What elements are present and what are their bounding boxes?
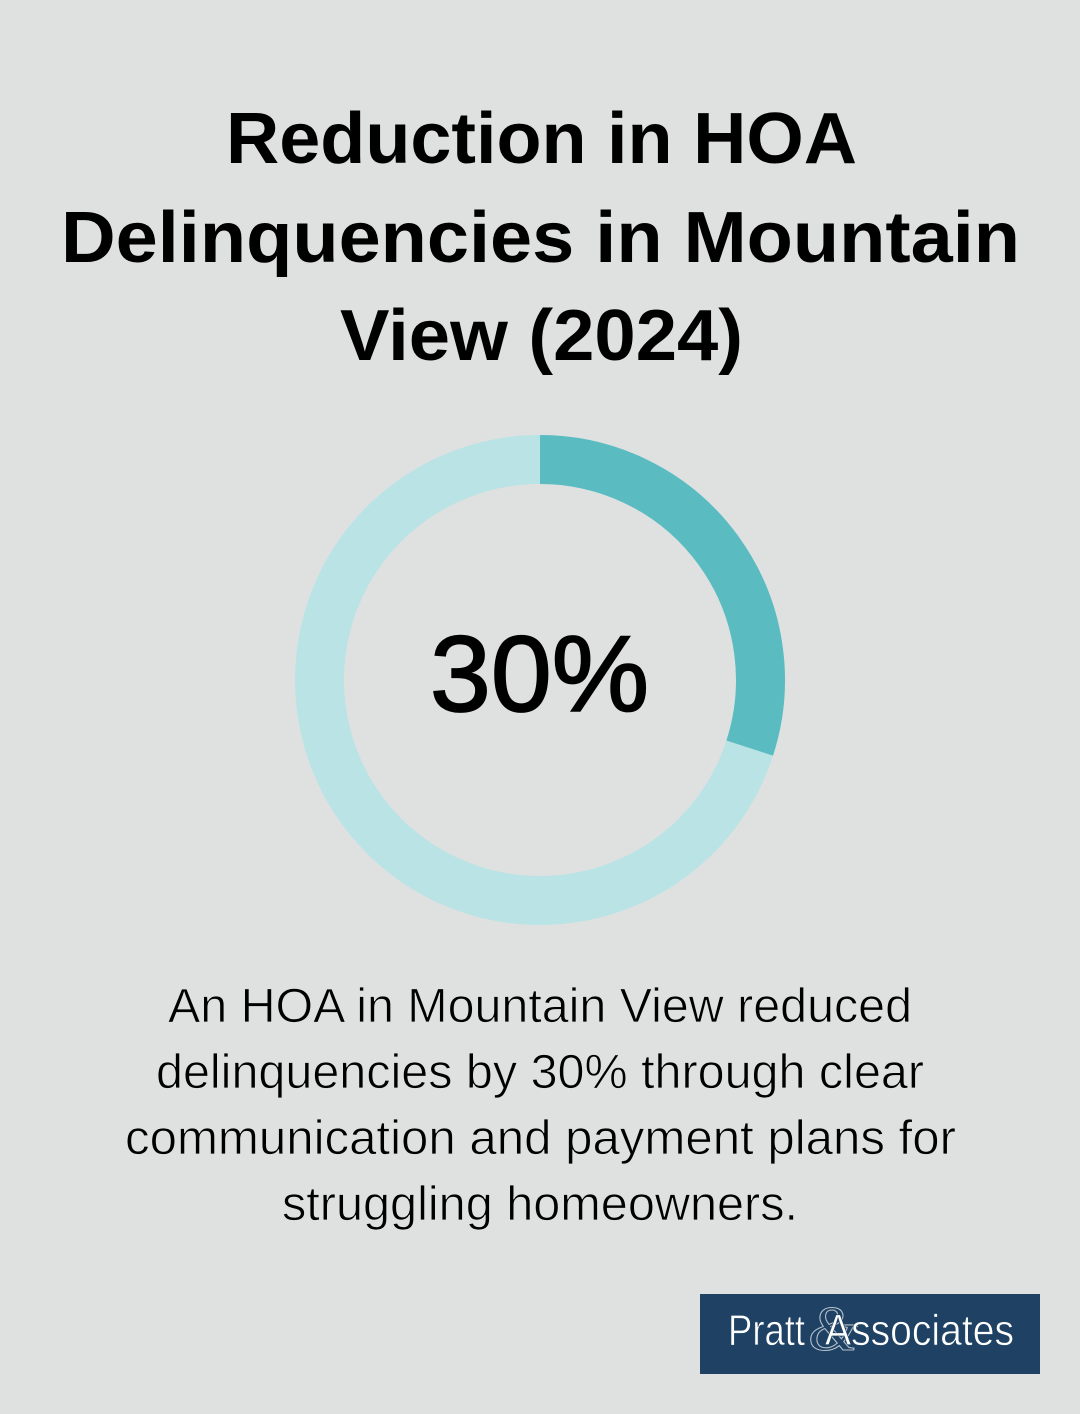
description text: delinquencies by 30% through clear (156, 1046, 924, 1099)
title: Reduction in HOA (226, 99, 857, 179)
donut value label: 30% (430, 613, 649, 734)
description text (125, 980, 956, 1231)
logo wordmark: Pratt (728, 1306, 805, 1355)
logo ampersand: & (808, 1293, 858, 1364)
logo wordmark: Associates (825, 1306, 1014, 1355)
logo background (700, 1294, 1040, 1374)
donut chart: 30% (320, 460, 760, 900)
title: Delinquencies in Mountain (61, 198, 1020, 278)
description text: An HOA in Mountain View reduced (168, 980, 912, 1033)
description text: communication and payment plans for (125, 1112, 956, 1165)
logo wordmark (728, 1306, 1014, 1355)
title: View (2024) (340, 296, 743, 376)
logo: Pratt & Associates (700, 1293, 1040, 1374)
donut track (320, 460, 760, 900)
donut value arc (540, 460, 760, 748)
title (61, 99, 1020, 376)
description text: struggling homeowners. (282, 1178, 798, 1231)
